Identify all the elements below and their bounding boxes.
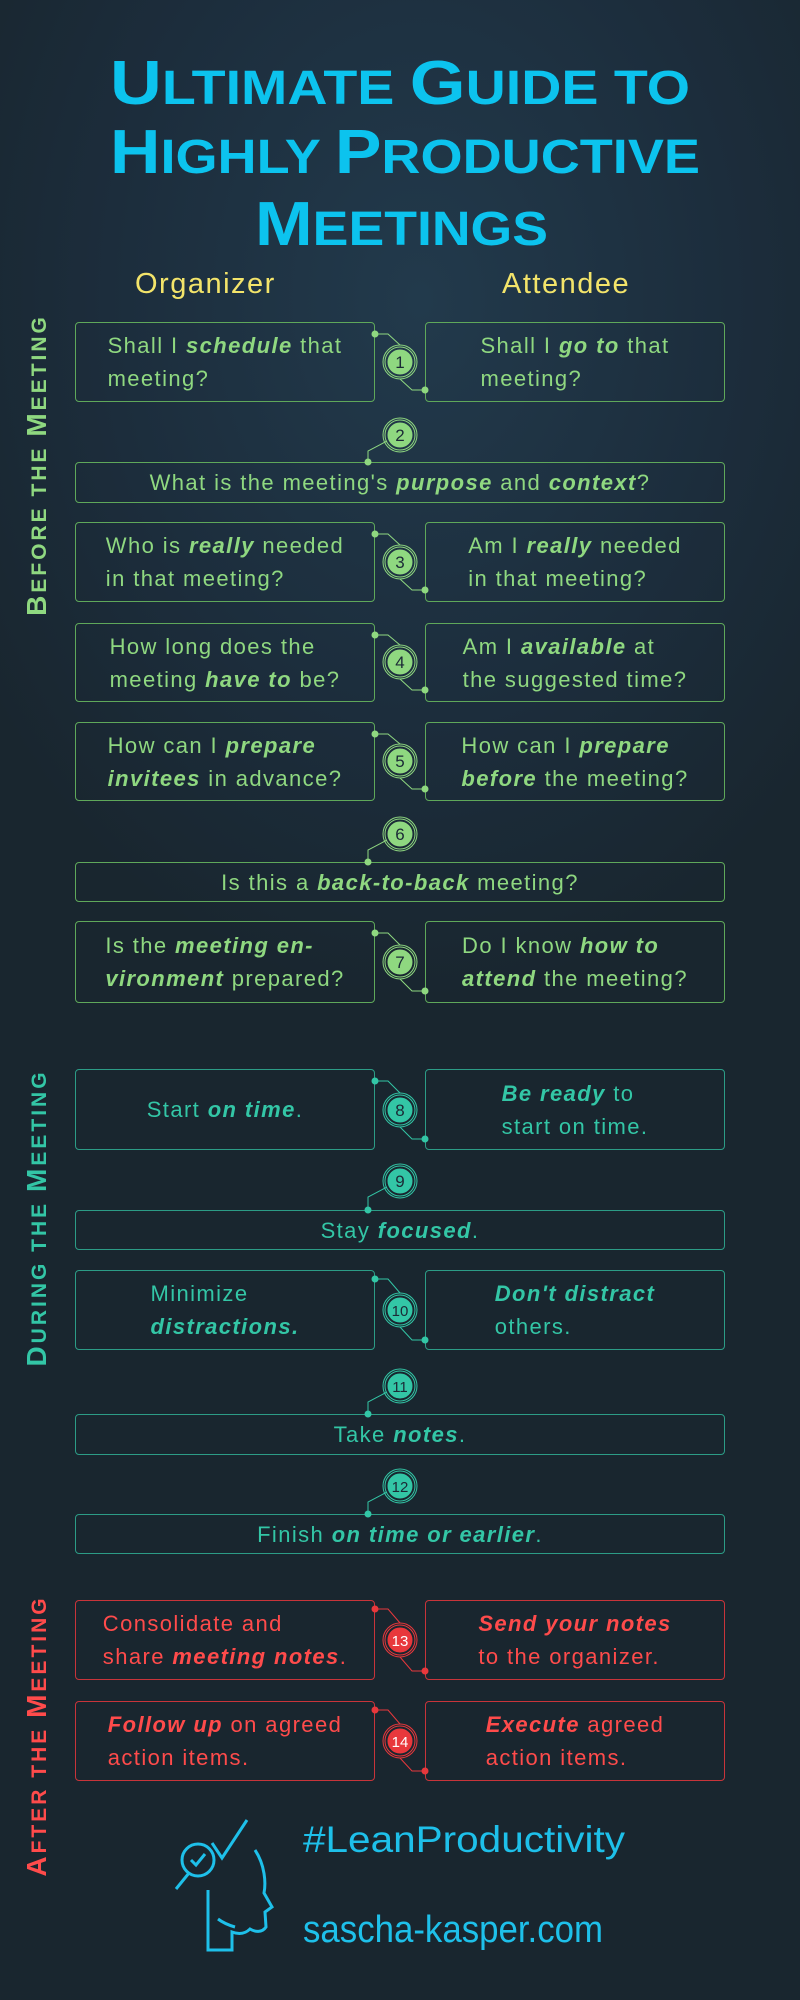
box 14 organizer: Follow up on agreed [108,1712,342,1737]
box 6: Is this a back-to-back meeting? [221,870,579,894]
badge 3 [372,531,428,593]
badge 9: 9 [395,1172,405,1191]
box 3 attendee: Am I really needed [468,533,682,558]
box 8 attendee: start on time. [502,1114,648,1138]
box 13 organizer: share meeting notes. [103,1644,347,1669]
box 13 organizer [75,1600,375,1680]
title: ULTIMATE GUIDE TO [110,49,690,118]
footer: hashtag and website: sascha-kasper.com [303,1909,603,1951]
badge 11: 11 [392,1379,408,1396]
box 4 organizer: meeting have to be? [110,666,340,692]
box 12: Finish on time or earlier. [257,1522,543,1546]
box 13 attendee: to the organizer. [478,1644,660,1669]
box 5 attendee: before the meeting? [461,766,689,790]
box 1 attendee: Shall I go to that [480,333,670,358]
badge 10: 10 [392,1303,408,1320]
side label: before: BEFORE THE MEETING [21,314,52,616]
badge 4 [372,632,428,693]
box 10 organizer: Minimize [150,1281,248,1306]
side label: during: DURING THE MEETING [21,1069,52,1367]
badge 12: 12 [392,1479,408,1496]
box 10 organizer: distractions. [150,1314,300,1339]
badge 13: 13 [392,1633,408,1650]
box 8 attendee: Be ready to [502,1080,634,1106]
header: organizer: Organizer [135,268,276,300]
box 14 attendee: action items. [486,1745,627,1770]
box 3 organizer: Who is really needed [106,533,344,558]
box 3 attendee: in that meeting? [468,566,647,591]
box 7 organizer: Is the meeting en- [105,933,314,958]
box 10 organizer [75,1270,375,1350]
badge 7 [372,930,428,994]
badge 7: 7 [395,953,405,972]
badge 6 [365,817,417,865]
box 6 [75,862,725,902]
footer: hashtag and website [303,1819,626,1951]
badge 9 [365,1164,417,1213]
box 9: Stay focused. [321,1218,479,1242]
box 1 organizer [75,322,375,402]
box 7 attendee: attend the meeting? [462,966,688,991]
box 1 organizer: meeting? [108,366,209,391]
title [110,49,700,259]
box 3 organizer: in that meeting? [106,566,285,591]
badge 8: 8 [395,1101,405,1120]
box 4 organizer [75,623,375,702]
box 5 attendee: How can I prepare [461,732,670,758]
box 2: What is the meeting's purpose and context? [150,470,650,495]
box 4 organizer: How long does the [110,634,316,658]
box 14 organizer: action items. [108,1745,249,1770]
badge 14 [372,1707,428,1774]
box 2 [75,462,725,503]
box 14 attendee: Execute agreed [486,1712,664,1737]
box 13 organizer: Consolidate and [103,1611,283,1636]
badge 2: 2 [395,426,405,445]
badge 2 [365,418,417,465]
box 4 attendee: the suggested time? [463,666,687,692]
box 14 attendee [425,1701,725,1781]
badge 1 [372,331,428,393]
title: MEETINGS [255,190,548,259]
badge 5: 5 [395,752,405,771]
box 7 organizer [75,921,375,1003]
box 10 attendee [425,1270,725,1350]
box 13 attendee: Send your notes [478,1611,672,1636]
box 7 organizer: vironment prepared? [105,966,345,991]
box 11: Take notes. [334,1422,466,1447]
badge 12 [365,1469,417,1517]
side label: after: AFTER THE MEETING [21,1595,52,1877]
box 5 organizer: invitees in advance? [108,766,342,790]
badge 5 [372,731,428,792]
title: HIGHLY PRODUCTIVE [110,118,700,187]
box 1 attendee [425,322,725,402]
box 14 organizer [75,1701,375,1781]
icon: head with magnifier [174,1819,274,1952]
box 4 attendee: Am I available at [463,634,655,658]
footer: hashtag and website: #LeanProductivity [303,1819,626,1860]
header: attendee: Attendee [502,268,630,300]
badge 3: 3 [395,553,405,572]
box 5 organizer [75,722,375,801]
badge 13 [372,1606,428,1674]
box 1 organizer: Shall I schedule that [108,333,342,358]
box 7 attendee [425,921,725,1003]
badge 10 [372,1276,428,1343]
box 10 attendee: others. [495,1314,572,1339]
box 4 attendee [425,623,725,702]
box 8 organizer [75,1069,375,1150]
box 5 organizer: How can I prepare [108,732,316,758]
badge 4: 4 [395,653,405,672]
box 3 attendee [425,522,725,602]
box 10 attendee: Don't distract [495,1281,655,1306]
box 11 [75,1414,725,1455]
badge 8 [372,1078,428,1142]
box 9 [75,1210,725,1250]
box 5 attendee [425,722,725,801]
box 8 organizer: Start on time. [147,1097,303,1122]
box 13 attendee [425,1600,725,1680]
box 7 attendee: Do I know how to [462,933,659,958]
badge 14: 14 [392,1734,408,1751]
badge 1: 1 [395,353,405,372]
badge 11 [365,1369,417,1417]
box 8 attendee [425,1069,725,1150]
box 1 attendee: meeting? [480,366,582,391]
badge 6: 6 [395,825,405,844]
box 3 organizer [75,522,375,602]
box 12 [75,1514,725,1554]
